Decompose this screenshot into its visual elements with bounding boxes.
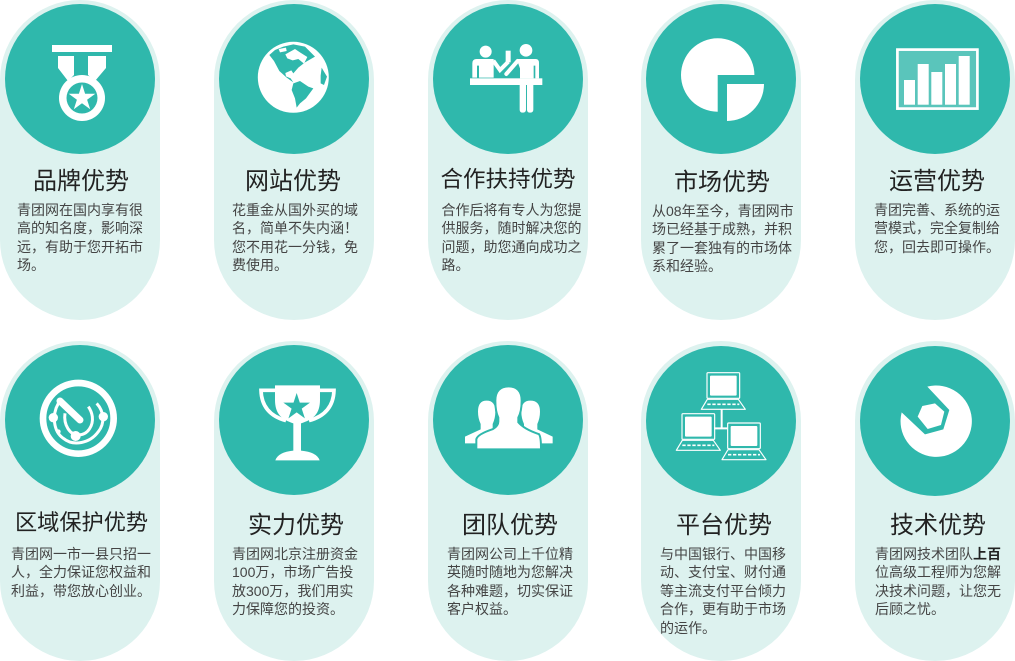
heading: 区域保护优势 (15, 510, 148, 535)
text block (447, 546, 573, 617)
text block: 英随时随地为您解决 (447, 564, 573, 580)
panel: 市场优势 (641, 0, 801, 320)
text block: 的运作。 (660, 620, 716, 636)
text block: 您，回去即可操作。 (874, 239, 1000, 255)
text block: 人，全力保证您权益和 (11, 564, 151, 580)
text block: 合作，更有助于市场 (660, 601, 786, 617)
panel: 团队优势 (428, 341, 588, 661)
panel: 品牌优势 (0, 0, 160, 320)
text block: 等主流支付平台倾力 (660, 583, 786, 599)
icon: trophy (219, 345, 369, 495)
heading: 运营优势 (889, 168, 985, 195)
text block: 青团网在国内享有很 (17, 202, 143, 218)
icon: bar chart (860, 4, 1010, 154)
text block: 利益，带您放心创业。 (11, 583, 151, 599)
text block (232, 546, 358, 617)
heading: 平台优势 (676, 512, 772, 539)
text block: 青团网一市一县只招一 (11, 546, 151, 562)
text block: 花重金从国外买的域 (232, 202, 358, 218)
panel: 运营优势 (855, 0, 1015, 320)
heading: 实力优势 (248, 512, 344, 539)
heading: 合作扶持优势 (440, 167, 576, 192)
text block: 累了一套独有的市场体 (652, 240, 792, 256)
text block: 从08年至今，青团网市 (652, 203, 794, 219)
text block (17, 202, 143, 273)
text block: 远，有助于您开拓市 (17, 239, 143, 255)
heading: 团队优势 (462, 512, 558, 539)
text block (660, 546, 786, 636)
text block (875, 546, 1001, 617)
icon: pie chart (646, 4, 796, 154)
text block: 决技术问题，让您无 (875, 583, 1001, 599)
panel: 技术优势 (855, 341, 1015, 661)
text block: 场已经基于成熟，并积 (652, 221, 792, 237)
text block: 系和经验。 (652, 258, 722, 274)
icon: service desk (433, 4, 583, 154)
text block: 后顾之忧。 (875, 601, 945, 617)
text block (11, 546, 151, 599)
heading: 技术优势 (890, 512, 986, 539)
text block: 青团网公司上千位精 (447, 546, 573, 562)
text block (652, 203, 794, 274)
panel: 区域保护优势 (0, 341, 160, 661)
text block: 100万，市场广告投 (232, 564, 353, 580)
icon: medal (5, 4, 155, 154)
text block: 高的知名度，影响深 (17, 220, 143, 236)
text block: 位高级工程师为您解 (875, 564, 1001, 580)
text block: 费使用。 (232, 257, 288, 273)
text block: 青团网技术团队上百 (875, 546, 1001, 562)
heading: 网站优势 (245, 168, 341, 195)
text block: 青团网北京注册资金 (232, 546, 358, 562)
text block (442, 202, 582, 273)
text block (874, 202, 1000, 255)
panel: 平台优势 (641, 341, 801, 661)
text block: 客户权益。 (447, 601, 517, 617)
heading: 市场优势 (674, 169, 770, 196)
text block: 问题，助您通向成功之 (442, 239, 582, 255)
text block: 各种难题，切实保证 (447, 583, 573, 599)
text block: 力保障您的投资。 (232, 601, 344, 617)
icon: team (433, 345, 583, 495)
text block: 供服务，随时解决您的 (442, 220, 582, 236)
heading: 品牌优势 (33, 168, 129, 195)
panel: 实力优势 (214, 341, 374, 661)
text block: 您不用花一分钱，免 (232, 239, 358, 255)
text block: 青团完善、系统的运 (874, 202, 1000, 218)
text block: 动、支付宝、财付通 (660, 564, 786, 580)
icon: radar (5, 345, 155, 495)
icon: globe (219, 4, 369, 154)
icon: networked computers (646, 346, 796, 496)
text block: 与中国银行、中国移 (660, 546, 786, 562)
text block: 合作后将有专人为您提 (442, 202, 582, 218)
panel: 网站优势 (214, 0, 374, 320)
text block (232, 202, 358, 273)
text block: 名，简单不失内涵！ (232, 220, 358, 236)
panel: 合作扶持优势 (428, 0, 588, 320)
icon: wrench (860, 346, 1010, 496)
text block: 场。 (17, 257, 45, 273)
text block: 营模式，完全复制给 (874, 220, 1000, 236)
text block: 放300万，我们用实 (232, 583, 353, 599)
text block: 路。 (442, 257, 470, 273)
